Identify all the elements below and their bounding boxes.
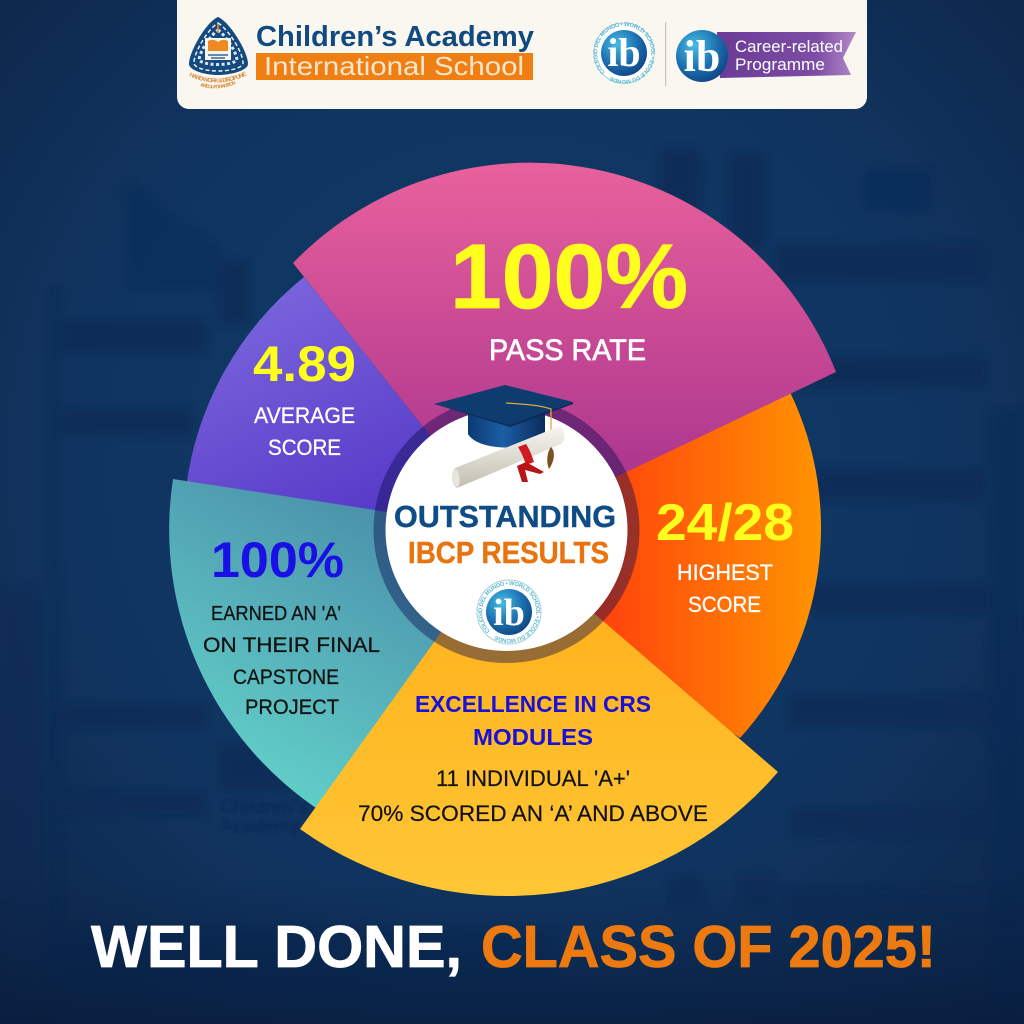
translucent ring [374,397,640,663]
segment: CRS modules [300,539,778,896]
segment: capstone project: CAPSTONE [233,666,339,689]
footer headline [91,914,936,980]
ghost signage on building: Children’s [220,797,307,817]
icon: IB Career-related Programme logo: ib [684,32,720,81]
segment: pass rate: PASS RATE [489,334,646,367]
segment: capstone project: ON THEIR FINAL [203,633,380,657]
icon: graduation cap and diploma [434,385,573,488]
icon: IB Career-related Programme logo: Programme [735,55,825,74]
footer headline: WELL DONE, [91,914,462,980]
segment: CRS modules: MODULES [473,724,593,750]
school subtitle bar: International School [264,51,524,81]
segment: capstone project: 100% [211,532,344,588]
header panel [177,0,867,109]
centre badge [364,353,678,694]
segment: highest score: SCORE [688,592,761,617]
icon: IB World School logo: ib [607,30,641,75]
school name: Children’s Academy [256,21,534,53]
icon: school crest: HARD WORK & DISCIPLINE [189,72,246,82]
segment: capstone project [169,479,520,812]
icon: IB logo: COLEGIO DEL MUNDO • WORLD SCHOOL • ECOLE DU MONDE [478,580,540,643]
pie chart [169,163,836,896]
footer headline: CLASS OF 2025! [481,914,936,980]
segment: average score [186,277,505,530]
icon: IB Career-related Programme logo [676,30,856,82]
badge subtitle: IBCP RESULTS [408,535,609,570]
segment: pass rate: 100% [450,226,688,328]
white disc [386,409,628,651]
icon: school crest: ARE OUR TRADITION [200,80,236,88]
segment: capstone project: PROJECT [245,696,339,719]
ghost signage on building [220,797,307,836]
icon: IB Career-related Programme logo: Career-related [735,37,843,56]
segment: average score: 4.89 [253,336,356,392]
segment: average score: SCORE [268,435,341,460]
segment: average score: AVERAGE [254,403,355,428]
segment: CRS modules: 11 INDIVIDUAL 'A+' [436,766,630,791]
segment: pass rate [293,163,836,530]
segment: capstone project: EARNED AN 'A' [211,602,341,625]
icon: IB World School logo: COLEGIO DEL MUNDO • WORLD SCHOOL • ECOLE DU MONDE [593,22,656,84]
badge title: OUTSTANDING [394,499,616,534]
ghost signage on building: Academy [220,816,300,836]
segment: CRS modules: EXCELLENCE IN CRS [415,691,651,717]
segment: highest score [505,392,821,738]
segment: highest score: 24/28 [656,494,794,552]
segment: highest score: HIGHEST [677,560,773,585]
segment: CRS modules: 70% SCORED AN ‘A’ AND ABOVE [358,801,708,826]
icon: IB logo: ib [493,592,525,634]
icon: school crest [189,17,248,88]
